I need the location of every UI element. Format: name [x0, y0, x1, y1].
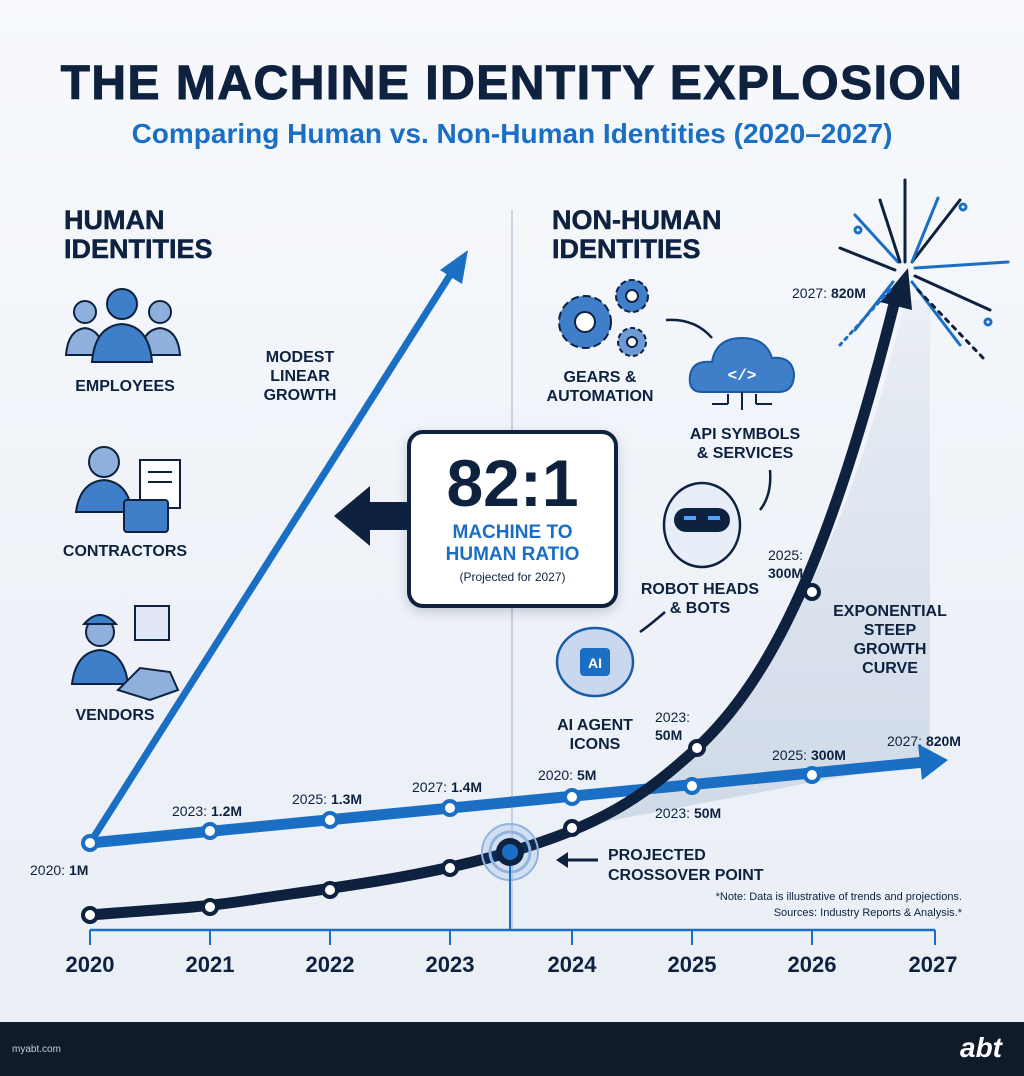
label: api symbols: & SERVICES	[697, 445, 793, 462]
icon: employees	[66, 289, 180, 362]
data labels	[30, 285, 961, 878]
label: gears & automation	[546, 369, 653, 405]
data labels: 2027: 1.4M	[412, 779, 482, 795]
crossover label	[556, 847, 764, 884]
callout: 82:1 ratio box: MACHINE TO	[452, 522, 572, 543]
axis: 2025	[668, 952, 716, 977]
note: Sources: Industry Reports & Analysis.*	[774, 907, 963, 919]
data labels: 2023: 50M	[655, 805, 721, 821]
label: modest linear growth: MODEST	[266, 349, 334, 366]
label: gears & automation: AUTOMATION	[547, 388, 653, 405]
label: robot heads	[641, 581, 759, 617]
label: exponential curve: GROWTH	[854, 641, 926, 658]
label: exponential curve: STEEP	[864, 622, 916, 639]
heading: non-human identities	[552, 205, 721, 264]
non-human exponential curve	[83, 268, 912, 922]
icon: cloud api: </>	[728, 367, 756, 385]
icon: contractors	[76, 447, 180, 532]
label: gears & automation: GEARS &	[564, 369, 636, 386]
label: exponential curve: EXPONENTIAL	[833, 603, 947, 620]
axis: 2027	[909, 952, 957, 977]
data labels: 300M	[768, 565, 803, 581]
icon: vendors	[72, 606, 178, 700]
callout: 82:1 ratio box: HUMAN RATIO	[446, 544, 579, 565]
data labels: 2027: 820M	[792, 285, 866, 301]
axis	[66, 930, 957, 977]
icon: cloud api	[690, 338, 794, 410]
icon: gears	[559, 280, 648, 356]
label: robot heads: ROBOT HEADS	[641, 581, 759, 598]
icon: AI brain: AI	[588, 655, 602, 671]
label: exponential curve	[833, 603, 947, 677]
label: modest linear growth: LINEAR	[270, 368, 330, 385]
note	[716, 891, 963, 919]
axis: 2021	[186, 952, 234, 977]
heading: human identities: IDENTITIES	[64, 234, 213, 264]
burst	[840, 180, 1008, 360]
crossover point	[482, 824, 538, 930]
data labels: 2023: 1.2M	[172, 803, 242, 819]
data labels: 2025: 1.3M	[292, 791, 362, 807]
axis: 2024	[548, 952, 597, 977]
label: modest linear growth: GROWTH	[264, 387, 336, 404]
arrows between icons	[640, 320, 770, 632]
data labels: 2027: 820M	[887, 733, 961, 749]
label: api symbols	[690, 426, 800, 462]
human growth line	[83, 744, 948, 850]
callout: 82:1 ratio box	[407, 430, 618, 608]
axis: 2026	[788, 952, 836, 977]
data labels: 2023:	[655, 709, 690, 725]
subtitle: Comparing Human vs. Non-Human Identities (2020–2027)	[132, 118, 892, 149]
footer: abt	[960, 1032, 1002, 1063]
callout: 82:1 ratio box: 82:1	[446, 446, 579, 520]
heading: non-human identities: IDENTITIES	[552, 234, 701, 264]
label: employees: EMPLOYEES	[75, 378, 175, 395]
callout: 82:1 ratio box: (Projected for 2027)	[459, 570, 566, 584]
axis: 2023	[426, 952, 474, 977]
axis: 2022	[306, 952, 354, 977]
title: THE MACHINE IDENTITY EXPLOSION	[61, 57, 963, 110]
heading: human identities: HUMAN	[64, 205, 164, 235]
note: *Note: Data is illustrative of trends and projections.	[716, 891, 962, 903]
footer: myabt.com	[12, 1044, 61, 1055]
arrow: left pointer from ratio box	[334, 486, 412, 546]
crossover label: PROJECTED	[608, 847, 706, 864]
axis: 2020	[66, 952, 114, 977]
label: api symbols: API SYMBOLS	[690, 426, 800, 443]
label: exponential curve: CURVE	[862, 660, 918, 677]
icon: AI brain	[557, 628, 633, 696]
data labels: 50M	[655, 727, 682, 743]
data labels: 2025: 300M	[772, 747, 846, 763]
data labels: 2020: 5M	[538, 767, 596, 783]
label: ai agent icons	[557, 717, 633, 753]
label: contractors: CONTRACTORS	[63, 543, 187, 560]
data labels: 2025:	[768, 547, 803, 563]
heading: human identities	[64, 205, 213, 264]
data labels: 2020: 1M	[30, 862, 88, 878]
heading: non-human identities: NON-HUMAN	[552, 205, 721, 235]
footer	[0, 1022, 1024, 1076]
icon: robot head	[664, 483, 740, 567]
label: modest linear growth	[264, 349, 336, 404]
label: ai agent icons: AI AGENT	[557, 717, 633, 734]
arrow: modest linear growth	[90, 250, 468, 843]
label: robot heads: & BOTS	[670, 600, 730, 617]
crossover label: CROSSOVER POINT	[608, 867, 764, 884]
label: vendors: VENDORS	[75, 707, 155, 724]
label: ai agent icons: ICONS	[570, 736, 620, 753]
